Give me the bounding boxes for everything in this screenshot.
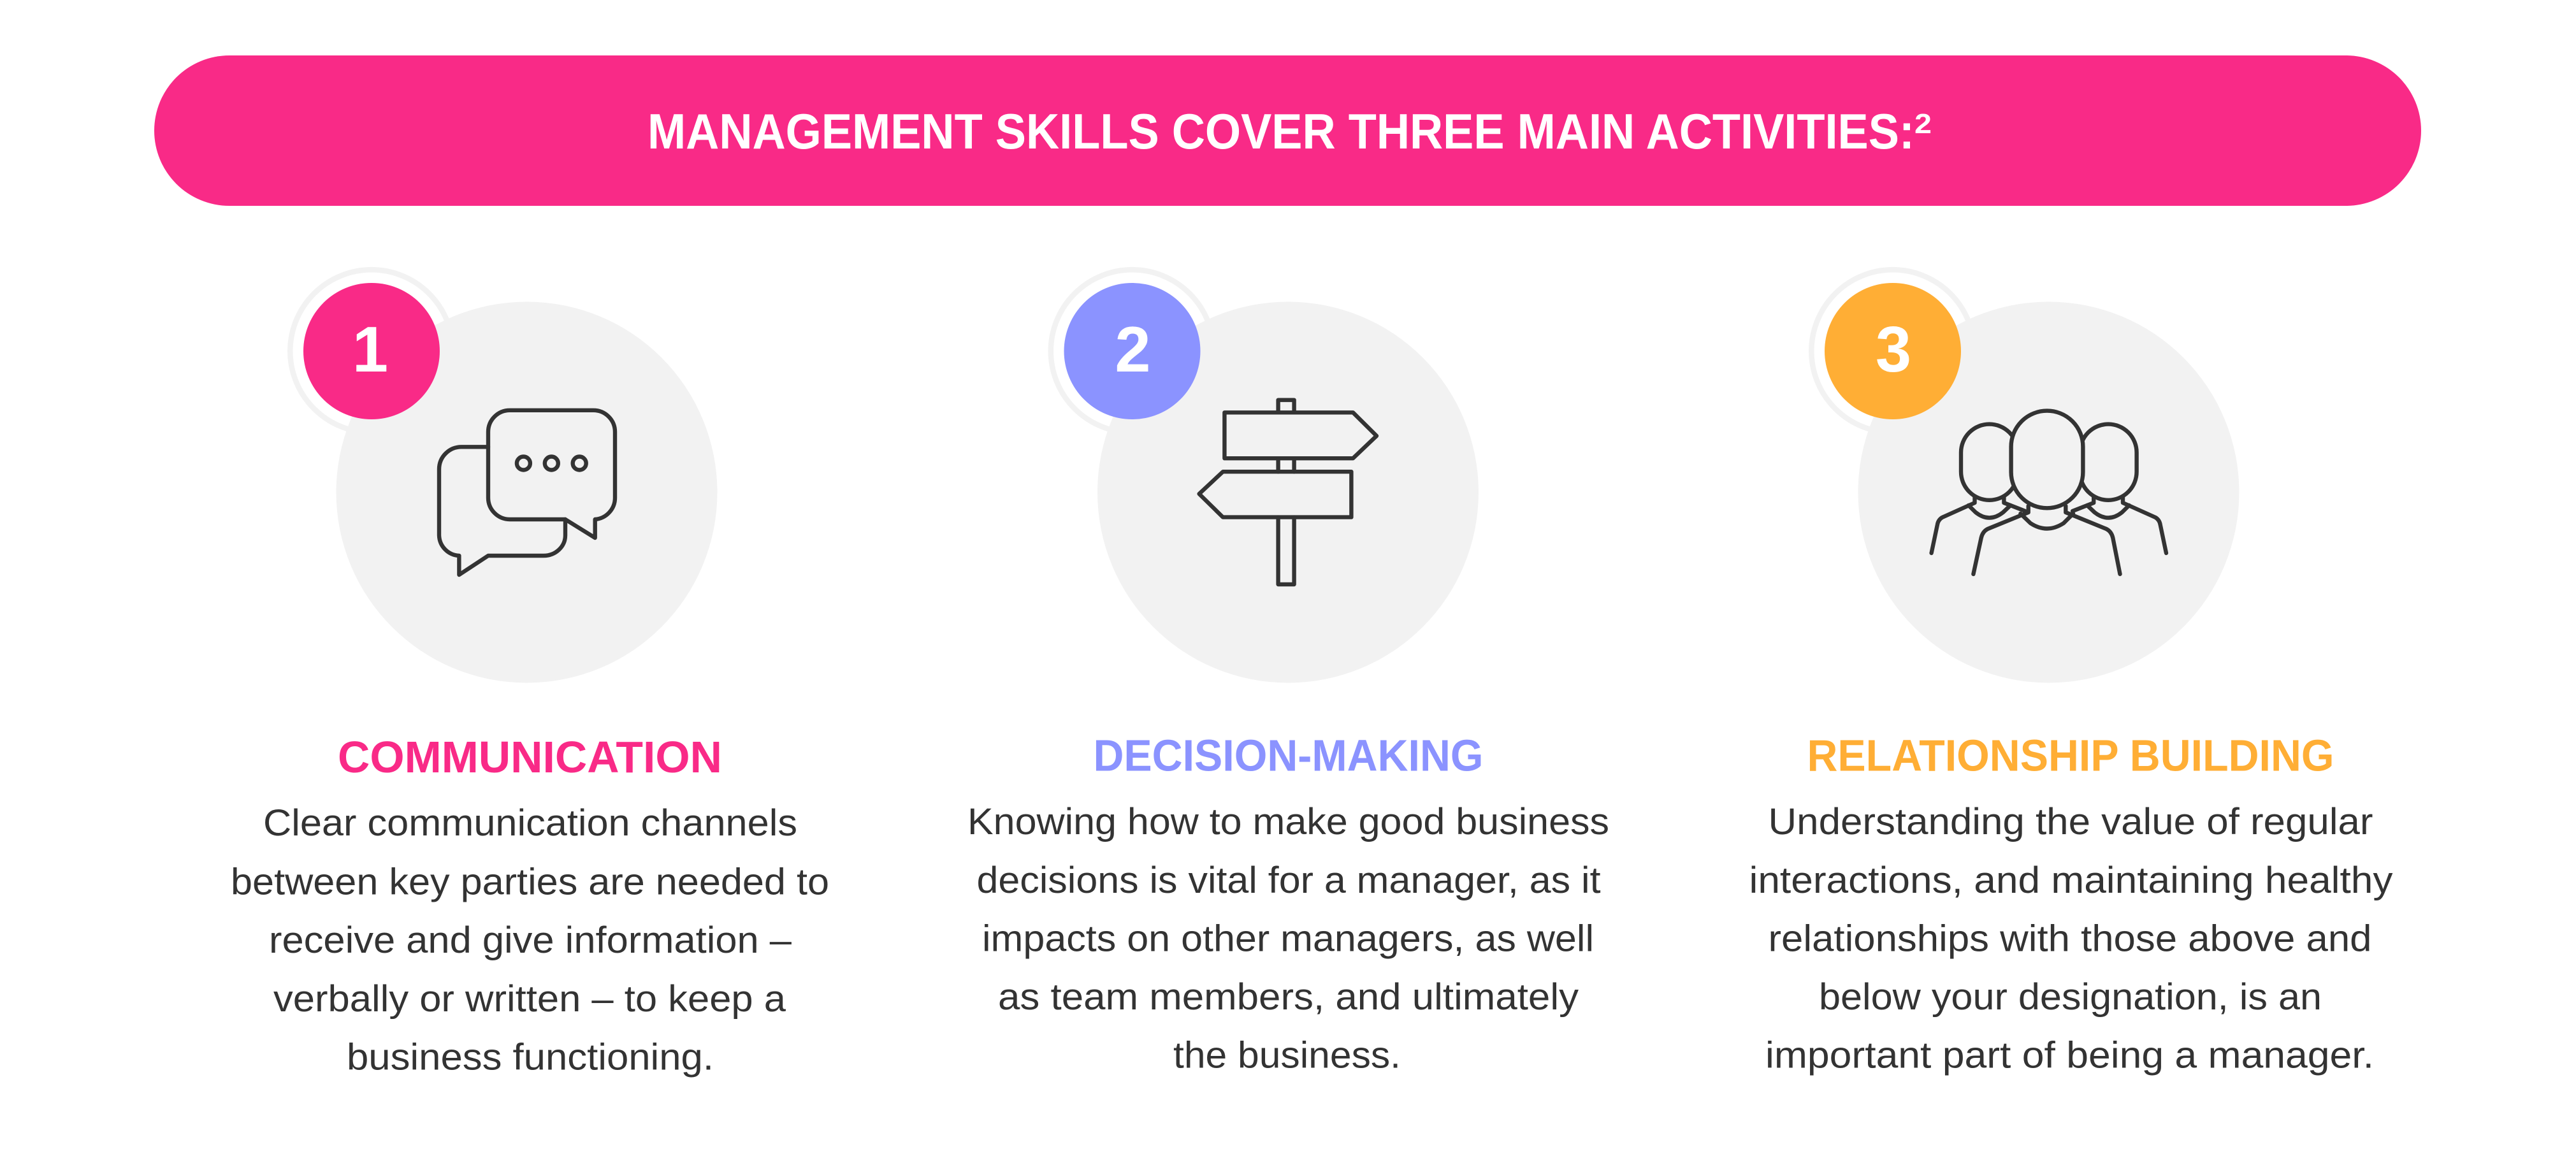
title text: MANAGEMENT SKILLS COVER THREE MAIN ACTIVITIES: — [648, 103, 1914, 159]
body text: relationship building: Understanding the value of regular — [1768, 801, 2373, 842]
number badge 3: 3 — [1876, 314, 1911, 386]
body text: communication: verbally or written – to keep a — [273, 978, 786, 1020]
heading: decision-making: DECISION-MAKING — [1094, 730, 1484, 780]
body text: relationship building — [1749, 801, 2392, 1076]
badge ring 2 — [1051, 270, 1213, 433]
icon: signpost — [1199, 400, 1377, 584]
body text: relationship building: below your designation, is an — [1819, 976, 2322, 1018]
number badge 3 — [1825, 283, 1961, 419]
badge ring 3 — [1811, 270, 1974, 433]
body text: relationship building: important part of being a manager. — [1765, 1035, 2374, 1076]
heading: communication: COMMUNICATION — [338, 732, 722, 782]
grey circle 2 — [1097, 302, 1479, 683]
icon: three people — [1932, 411, 2166, 574]
panel: communication — [231, 270, 829, 1078]
body text: communication: Clear communication channels — [263, 802, 797, 844]
body text: decision-making: Knowing how to make good business — [967, 801, 1609, 842]
body text: decision-making: impacts on other managers, as well — [982, 918, 1594, 960]
panel: relationship building — [1749, 270, 2392, 1076]
panel: decision-making — [967, 270, 1609, 1076]
body text: communication — [231, 802, 829, 1078]
body text: relationship building: relationships with those above and — [1768, 918, 2372, 960]
number badge 2: 2 — [1115, 314, 1151, 386]
number badge 2 — [1064, 283, 1201, 419]
heading: relationship building: RELATIONSHIP BUILDING — [1807, 730, 2334, 780]
body text: communication: business functioning. — [347, 1036, 714, 1078]
body text: communication: receive and give information – — [269, 920, 792, 961]
body text: decision-making: the business. — [1173, 1035, 1401, 1076]
body text: decision-making: decisions is vital for a manager, as it — [976, 860, 1601, 901]
badge ring 1 — [290, 270, 453, 433]
body text: decision-making: as team members, and ultimately — [998, 976, 1579, 1018]
icon: speech bubbles — [439, 410, 615, 575]
body text: relationship building: interactions, and maintaining healthy — [1749, 860, 2392, 901]
number badge 1 — [303, 283, 440, 419]
number badge 1: 1 — [352, 314, 388, 386]
body text: communication: between key parties are needed to — [231, 862, 829, 902]
body text: decision-making — [967, 801, 1609, 1076]
footnote marker: 2 — [1914, 108, 1932, 140]
title banner — [154, 55, 2421, 206]
grey circle 3 — [1858, 302, 2240, 683]
grey circle 1 — [336, 302, 718, 683]
